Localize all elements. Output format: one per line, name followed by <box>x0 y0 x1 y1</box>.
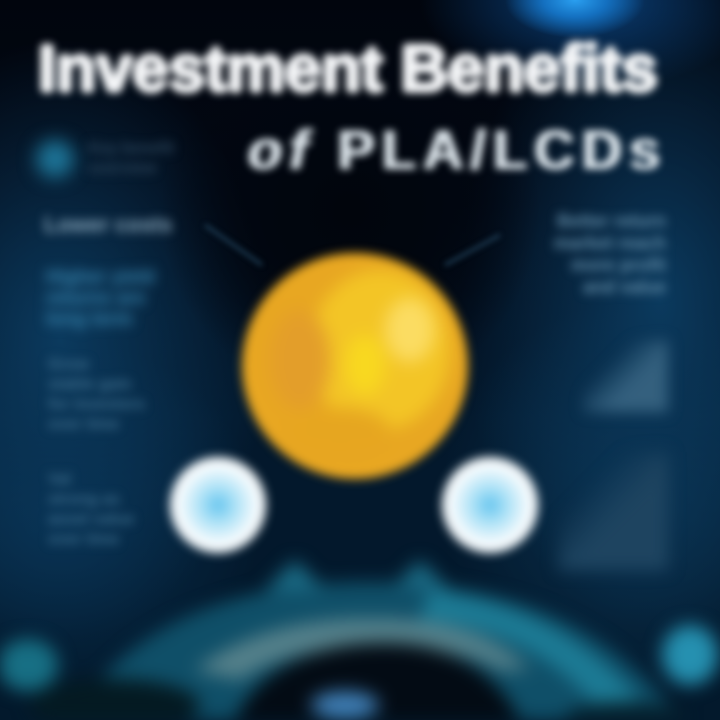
title: of PLA/LCDs <box>248 118 667 181</box>
left label: top <box>88 140 176 177</box>
left label: block two: Grow <box>48 356 89 373</box>
right white badge <box>442 457 538 553</box>
right label: block two <box>583 340 668 412</box>
left label: block one: Higher yield <box>46 267 155 288</box>
left white badge <box>170 457 266 553</box>
right text column <box>550 209 674 575</box>
left label: block one: long term <box>46 309 133 330</box>
sphere mottling <box>270 270 450 452</box>
right label: block three <box>558 452 668 570</box>
left label: block two: over time <box>48 416 119 433</box>
left label: block one: returns are <box>46 288 145 309</box>
left label: block three: over time <box>48 531 119 548</box>
left text column <box>39 140 176 548</box>
right label: block one: and value <box>583 277 666 297</box>
right corner glow <box>662 625 718 685</box>
right lower shadow <box>565 702 685 720</box>
left label: block three <box>48 471 135 548</box>
left label: block three: asset value <box>48 511 134 528</box>
left corner glow <box>0 639 58 691</box>
inner dome light <box>195 618 530 680</box>
right label: block one <box>550 209 669 298</box>
left label: block two: for investors <box>48 396 145 413</box>
right label: block one: Better return <box>557 211 666 231</box>
title: Investment Benefits <box>38 31 658 105</box>
left label: top: Key benefit <box>88 140 174 157</box>
left label: block one <box>42 264 160 333</box>
left label: block three: strong as <box>48 491 120 508</box>
left lower shadow <box>30 679 200 720</box>
left label: block three: Val <box>48 471 71 488</box>
right label: block one: more profit <box>571 255 666 275</box>
dark opening <box>235 643 520 720</box>
peak highlights <box>265 560 450 590</box>
left label: top: overview <box>88 160 156 177</box>
bottom dome scene <box>0 554 720 720</box>
outer dome <box>70 582 680 720</box>
left label: block two <box>47 356 146 433</box>
central gold sphere <box>234 245 476 487</box>
title <box>34 31 667 181</box>
left label: heading: Lower costs <box>44 212 172 237</box>
bottom glow <box>311 691 379 719</box>
right label: block one: market reach <box>554 233 666 253</box>
left header icon <box>36 140 74 178</box>
left label: block two: stable gain <box>48 376 132 393</box>
upper band <box>420 590 640 710</box>
